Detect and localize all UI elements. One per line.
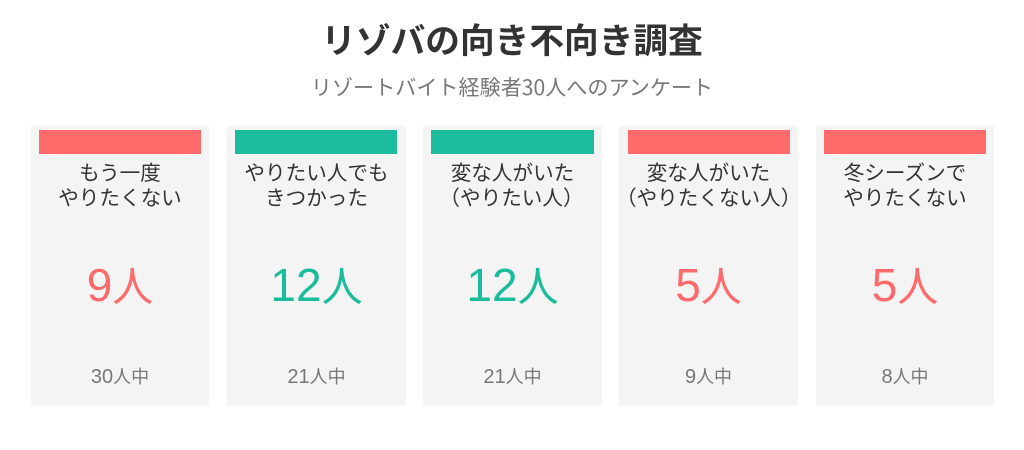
count: 12人	[466, 253, 559, 313]
card heading	[58, 156, 182, 211]
card heading: 冬シーズンで	[844, 156, 966, 186]
base count: 30人中	[91, 363, 149, 389]
panel: 冬シーズンでやりたくない	[816, 126, 994, 406]
subtitle: リゾートバイト経験者30人へのアンケート	[311, 72, 713, 102]
card heading	[616, 156, 801, 211]
base count: 8人中	[881, 363, 929, 389]
card heading: きつかった	[265, 181, 368, 211]
count: 5人	[675, 253, 742, 313]
card heading: （やりたい人）	[439, 181, 584, 211]
card heading: 変な人がいた	[451, 156, 574, 186]
red header bar	[628, 130, 790, 154]
base count: 21人中	[483, 363, 542, 389]
card heading	[244, 156, 389, 211]
card heading	[843, 156, 967, 211]
card heading: やりたくない	[58, 181, 182, 211]
panel: 変な人がいた（やりたい人）	[423, 126, 602, 406]
panel: やりたい人でもきつかった	[227, 126, 406, 406]
card heading	[439, 156, 584, 211]
base count: 21人中	[287, 363, 346, 389]
green header bar	[235, 130, 397, 154]
card heading: もう一度	[79, 156, 161, 186]
red header bar	[39, 130, 201, 154]
panel: 変な人がいた（やりたくない人）	[619, 126, 798, 406]
card heading: 変な人がいた	[647, 156, 770, 186]
count: 9人	[87, 253, 153, 313]
green header bar	[431, 130, 594, 154]
card heading: （やりたくない人）	[616, 181, 801, 211]
red header bar	[824, 130, 986, 154]
base count: 9人中	[685, 363, 732, 389]
card heading: やりたくない	[843, 181, 967, 211]
card heading: やりたい人でも	[244, 156, 389, 186]
count: 12人	[270, 253, 363, 313]
title: リゾバの向き不向き調査	[321, 13, 703, 63]
panel: もう一度やりたくない	[31, 126, 209, 406]
count: 5人	[872, 253, 938, 313]
